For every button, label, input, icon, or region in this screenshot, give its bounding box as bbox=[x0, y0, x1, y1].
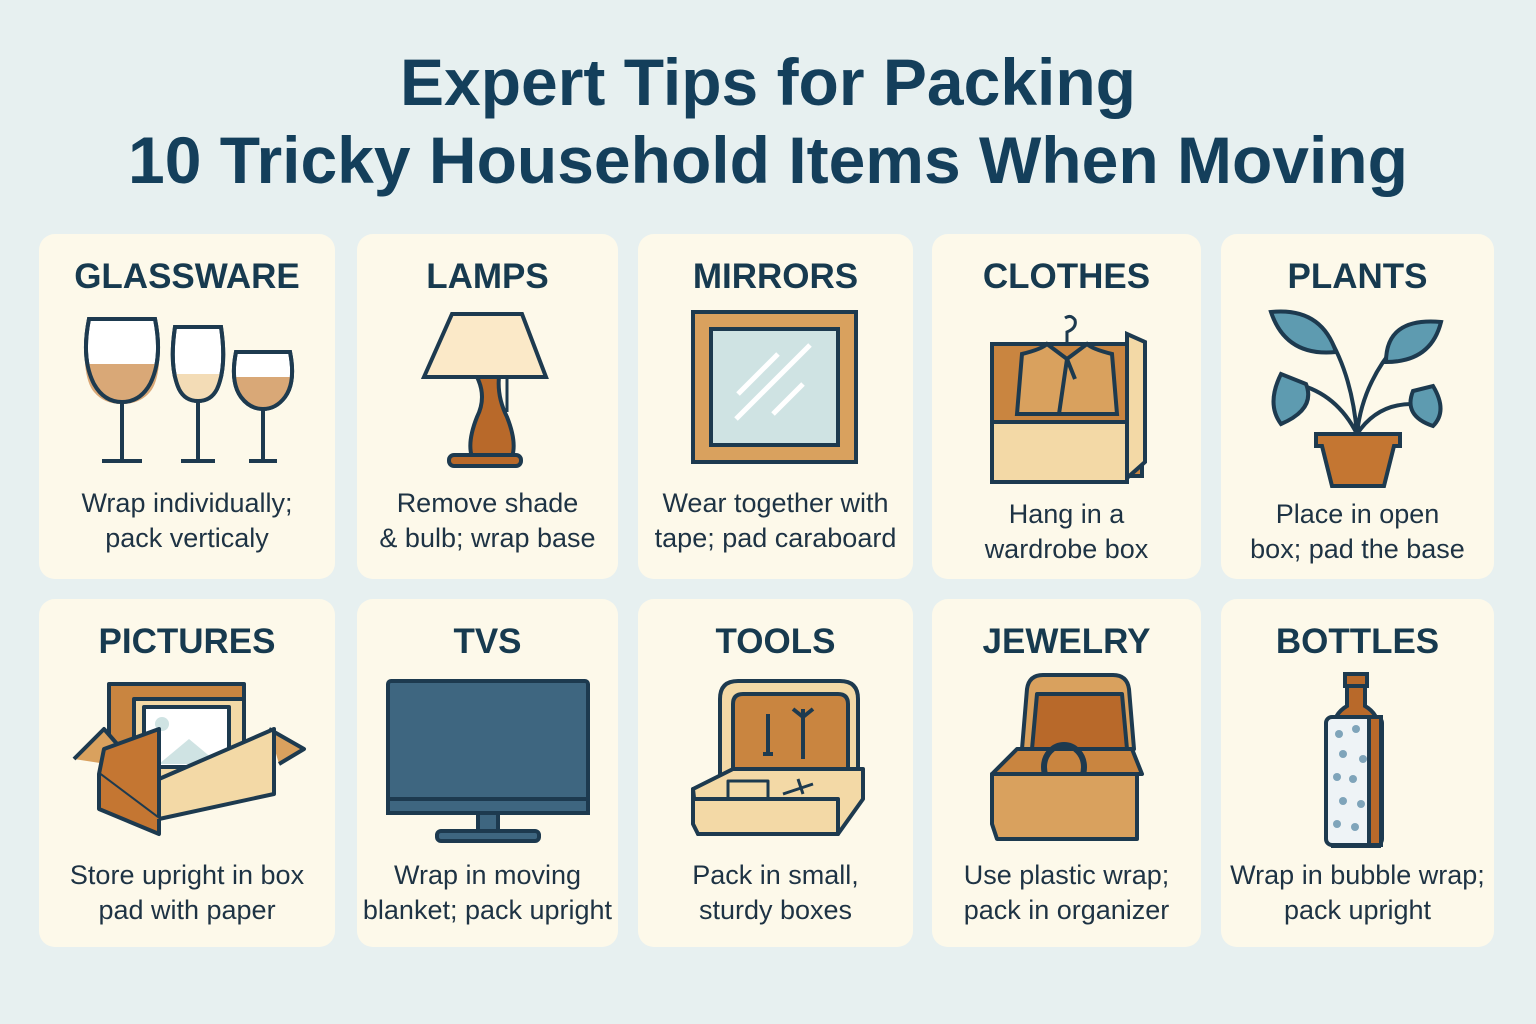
panel: clothes: Hang in a bbox=[1009, 499, 1124, 529]
panel: tools: TOOLS bbox=[716, 622, 835, 661]
panel: pictures: pad with paper bbox=[98, 895, 276, 925]
panel: jewelry: pack in organizer bbox=[964, 895, 1169, 925]
icon: pictures box bbox=[72, 682, 306, 836]
icon: wardrobe box bbox=[990, 314, 1147, 484]
panel: bottles: pack upright bbox=[1284, 895, 1431, 925]
panel: pictures: Store upright in box bbox=[70, 860, 304, 890]
icon: bottle bbox=[1324, 672, 1384, 848]
panel: tvs: blanket; pack upright bbox=[363, 895, 612, 925]
panel: jewelry: Use plastic wrap; bbox=[964, 860, 1169, 890]
icon: toolbox bbox=[691, 679, 865, 836]
panel: lamps: LAMPS bbox=[426, 257, 549, 296]
panel: glassware bbox=[39, 234, 335, 579]
icon: mirror bbox=[691, 310, 858, 464]
panel: mirrors: MIRRORS bbox=[693, 257, 858, 296]
panel: mirrors bbox=[638, 234, 913, 579]
panel: bottles: Wrap in bubble wrap; bbox=[1230, 860, 1485, 890]
panel: tvs bbox=[357, 599, 618, 947]
icon: glasses bbox=[84, 317, 294, 463]
panel: lamps bbox=[357, 234, 618, 579]
panel: lamps: & bulb; wrap base bbox=[379, 523, 596, 553]
panel: tools bbox=[638, 599, 913, 947]
panel: mirrors: tape; pad caraboard bbox=[655, 523, 896, 553]
panel: clothes bbox=[932, 234, 1201, 579]
panel: clothes: wardrobe box bbox=[985, 534, 1148, 564]
panel: plants: PLANTS bbox=[1288, 257, 1428, 296]
panel: lamps: Remove shade bbox=[397, 488, 578, 518]
panel: mirrors: Wear together with bbox=[662, 488, 889, 518]
title bbox=[128, 45, 1408, 197]
icon: jewelry box bbox=[990, 673, 1144, 841]
panel: plants: Place in open bbox=[1276, 499, 1439, 529]
panel: plants: box; pad the base bbox=[1250, 534, 1465, 564]
panel: bottles: BOTTLES bbox=[1276, 622, 1439, 661]
panel: pictures: PICTURES bbox=[99, 622, 275, 661]
panel: tools: Pack in small, bbox=[692, 860, 859, 890]
panel: bottles bbox=[1221, 599, 1494, 947]
panel: tvs: TVS bbox=[453, 622, 522, 661]
panel: tools: sturdy boxes bbox=[699, 895, 852, 925]
panel: tvs: Wrap in moving bbox=[394, 860, 581, 890]
icon: plant bbox=[1268, 310, 1444, 488]
panel: pictures bbox=[39, 599, 335, 947]
panel: plants bbox=[1221, 234, 1494, 579]
panel: glassware: pack verticaly bbox=[105, 523, 269, 553]
title: Expert Tips for Packing bbox=[400, 45, 1136, 119]
panel: glassware: Wrap individually; bbox=[81, 488, 293, 518]
panel: glassware: GLASSWARE bbox=[74, 257, 300, 296]
icon: lamp bbox=[421, 312, 549, 468]
panel: clothes: CLOTHES bbox=[983, 257, 1150, 296]
panel: jewelry bbox=[932, 599, 1201, 947]
title: 10 Tricky Household Items When Moving bbox=[128, 123, 1408, 197]
panel: jewelry: JEWELRY bbox=[983, 622, 1150, 661]
icon: tv bbox=[386, 679, 590, 843]
